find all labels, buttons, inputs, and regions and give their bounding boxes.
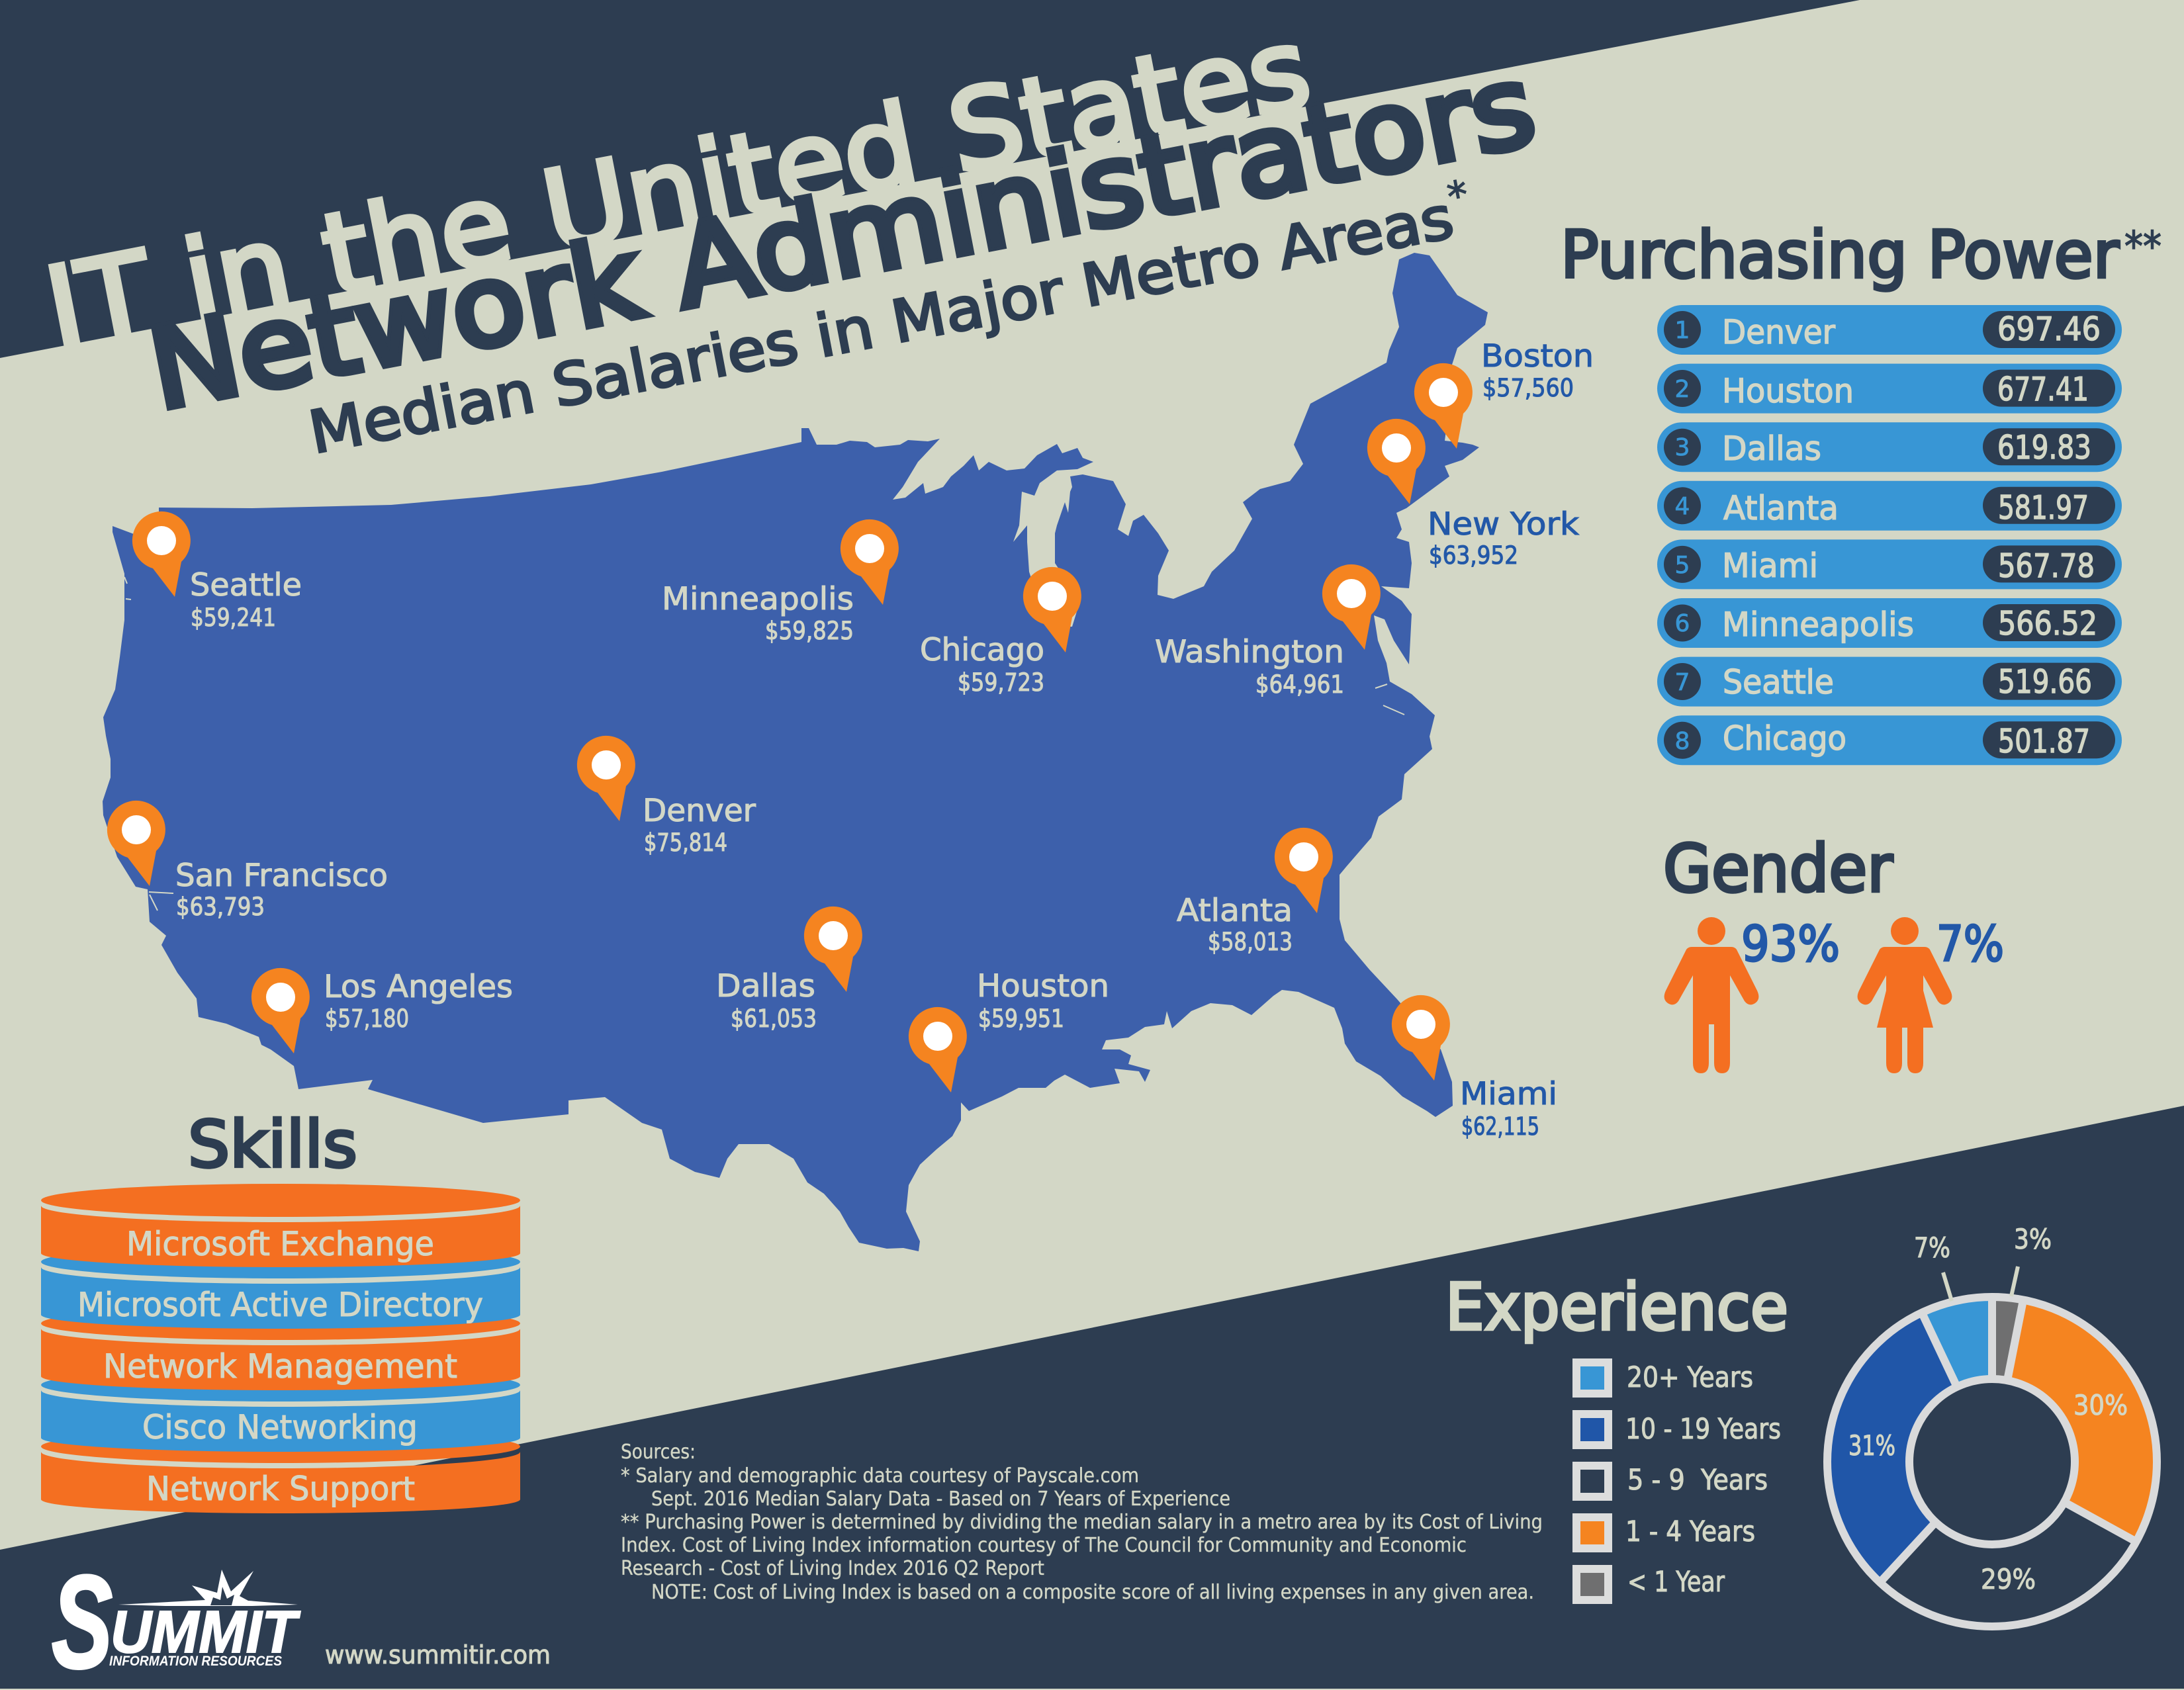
row 8: Chicago: 8: [1675, 728, 1690, 755]
stat: male 93%: 93%: [1741, 916, 1840, 973]
map: contiguous United States: [103, 253, 1488, 1251]
city: Dallas: Dallas: [716, 968, 815, 1004]
city: Dallas: [716, 907, 862, 1033]
disk: Cisco Networking: Cisco Networking: [142, 1408, 418, 1446]
donut chart: experience: [1827, 1223, 2157, 1626]
row 6: Minneapolis: Minneapolis: [1722, 605, 1914, 644]
title: Network Administrators: Network Administrators: [139, 40, 1545, 435]
row 7: Seattle: 519.66: [1998, 663, 2092, 701]
legend item: 10 - 19 Years: 10 - 19 Years: [1625, 1413, 1781, 1446]
disk: Network Management: Network Management: [103, 1347, 457, 1386]
city: Minneapolis: Minneapolis: [662, 581, 854, 617]
row 1: Denver: Denver: [1722, 313, 1835, 351]
legend item: 5 - 9 Years: 5 - 9 Years: [1627, 1464, 1768, 1497]
sources text block: Index. Cost of Living Index information courtesy of The Council for Community and Economic: [621, 1534, 1467, 1557]
row 4: Atlanta: 581.97: [1998, 489, 2089, 527]
legend item: less than 1 Year: [1576, 1566, 1725, 1600]
city: Miami: Miami: [1460, 1076, 1557, 1112]
city: Denver: [577, 736, 756, 857]
city: Atlanta: $58,013: [1208, 928, 1293, 956]
city: New York: $63,952: [1429, 541, 1518, 570]
row 1: Denver: [1657, 305, 2122, 355]
city: Houston: Houston: [977, 968, 1109, 1004]
panel: purchasing power ranking: [1657, 305, 2122, 765]
city: Atlanta: Atlanta: [1177, 893, 1293, 929]
city: Chicago: $59,723: [958, 668, 1044, 697]
row 1: Denver: 697.46: [1997, 310, 2101, 348]
sources text block: * Salary and demographic data courtesy of Payscale.com: [621, 1464, 1139, 1488]
row 2: Houston: [1657, 364, 2122, 414]
sources text block: Sept. 2016 Median Salary Data - Based on 7 Years of Experience: [651, 1488, 1230, 1511]
label: 29%: 29%: [1981, 1563, 2036, 1595]
city: Los Angeles: [251, 968, 513, 1053]
website url: www.summitir.com: [325, 1640, 551, 1669]
city: San Francisco: [107, 801, 388, 921]
row 3: Dallas: 619.83: [1997, 429, 2091, 467]
logo: Summit Information Resources: UMMIT: [111, 1599, 301, 1666]
city: Miami: [1392, 995, 1557, 1141]
city: New York: New York: [1428, 506, 1580, 543]
city: Miami: $62,115: [1461, 1112, 1539, 1141]
row 8: Chicago: [1657, 715, 2122, 765]
city: Washington: $64,961: [1255, 670, 1344, 699]
city: Chicago: Chicago: [920, 632, 1044, 668]
heading: Purchasing Power: **: [2124, 222, 2161, 271]
stat: female 7%: 7%: [1936, 916, 2004, 973]
disk: Microsoft Exchange: [41, 1184, 520, 1267]
row 2: Houston: 2: [1675, 376, 1690, 403]
row 8: Chicago: Chicago: [1723, 719, 1846, 758]
label: 7%: 7%: [1914, 1231, 1950, 1264]
city: San Francisco: San Francisco: [175, 858, 388, 894]
row 2: Houston: 677.41: [1997, 371, 2089, 408]
city: Chicago: [920, 567, 1081, 697]
footer dark band: [0, 1106, 2184, 1690]
row 7: Seattle: [1657, 657, 2122, 707]
heading: Purchasing Power: Purchasing Power: [1561, 218, 2120, 293]
heading: Skills: Skills: [188, 1107, 357, 1182]
city: Minneapolis: [662, 519, 899, 645]
legend item: 1 - 4 Years: [1576, 1515, 1755, 1548]
sources text block: ** Purchasing Power is determined by dividing the median salary in a metro area by its Cost of Living: [621, 1511, 1543, 1534]
city: Dallas: $61,053: [731, 1004, 817, 1033]
city: Atlanta: [1177, 828, 1333, 956]
legend item: 10 - 19 Years: [1576, 1413, 1781, 1446]
disk: Network Support: [41, 1430, 520, 1513]
icon: female figure: [1858, 917, 1952, 1073]
city: Houston: $59,951: [978, 1004, 1064, 1033]
city: Boston: [1414, 338, 1594, 449]
city: San Francisco: $63,793: [176, 893, 265, 921]
legend item: 1 - 4 Years: 1 - 4 Years: [1625, 1515, 1755, 1548]
city: Denver: $75,814: [644, 828, 727, 857]
row 7: Seattle: 7: [1675, 669, 1690, 696]
row 4: Atlanta: [1657, 481, 2122, 531]
row 6: Minneapolis: 566.52: [1998, 605, 2097, 643]
row 4: Atlanta: 4: [1675, 493, 1690, 520]
legend item: 5 - 9 Years: [1576, 1464, 1768, 1497]
disk: Network Management: [41, 1307, 520, 1390]
city: Los Angeles: Los Angeles: [324, 969, 513, 1005]
label: 30%: 30%: [2073, 1389, 2128, 1421]
row 1: Denver: 1: [1675, 317, 1690, 344]
label: 3%: 3%: [2014, 1223, 2052, 1255]
disk: Microsoft Exchange: Microsoft Exchange: [126, 1225, 434, 1263]
disk: Cisco Networking: [41, 1368, 520, 1452]
city: Denver: Denver: [643, 793, 756, 829]
header dark band: [0, 0, 1860, 358]
row 5: Miami: [1657, 539, 2122, 589]
disk: Microsoft Active Directory: [41, 1245, 520, 1329]
sources text block: NOTE: Cost of Living Index is based on a composite score of all living expenses in any given area.: [651, 1581, 1534, 1604]
label: 31%: 31%: [1848, 1429, 1895, 1462]
disk: Microsoft Active Directory: Microsoft Active Directory: [77, 1286, 483, 1324]
legend item: less than 1 Year: < 1 Year: [1627, 1566, 1725, 1599]
sources text block: Sources:: [621, 1441, 696, 1464]
city: Seattle: $59,241: [191, 603, 276, 632]
sources text block: Research - Cost of Living Index 2016 Q2 Report: [621, 1557, 1044, 1580]
row 5: Miami: 5: [1675, 552, 1690, 579]
panel: skills cylinder stack: [41, 1184, 520, 1513]
disk: Network Support: Network Support: [146, 1470, 415, 1508]
legend item: 20+ Years: [1576, 1361, 1753, 1394]
tick: 3%: [2011, 1267, 2018, 1296]
row 3: Dallas: [1657, 422, 2122, 472]
tick: 7%: [1943, 1272, 1952, 1301]
city: Los Angeles: $57,180: [325, 1004, 409, 1033]
row 7: Seattle: Seattle: [1723, 663, 1834, 701]
subtitle: Median Salaries in Major Metro Areas: *: [1444, 171, 1472, 221]
row 5: Miami: 567.78: [1998, 547, 2095, 585]
heading: Experience: Experience: [1445, 1270, 1788, 1345]
icon: male figure: [1664, 917, 1758, 1073]
row 6: Minneapolis: 6: [1675, 610, 1690, 637]
row 5: Miami: Miami: [1722, 547, 1818, 585]
legend item: 20+ Years: 20+ Years: [1627, 1361, 1753, 1394]
city: Washington: Washington: [1155, 634, 1344, 670]
city: Seattle: Seattle: [190, 567, 302, 603]
heading: Gender: Gender: [1663, 831, 1893, 907]
city: Houston: [909, 968, 1109, 1092]
row 2: Houston: Houston: [1722, 372, 1854, 410]
row 8: Chicago: 501.87: [1998, 723, 2090, 760]
city: Seattle: [132, 511, 302, 632]
city: Boston: Boston: [1481, 338, 1594, 375]
subtitle: Median Salaries in Major Metro Areas: Median Salaries in Major Metro Areas: [304, 183, 1459, 467]
legend: experience: [1576, 1361, 1781, 1600]
sources text block: [621, 1441, 1543, 1604]
row 3: Dallas: 3: [1675, 434, 1690, 461]
title: IT in the United States: IT in the United States: [36, 3, 1320, 374]
row 6: Minneapolis: [1657, 598, 2122, 648]
logo: Summit Information Resources: INFORMATION RESOURCES: [109, 1654, 282, 1669]
row 3: Dallas: Dallas: [1722, 429, 1821, 468]
city: Boston: $57,560: [1482, 374, 1574, 402]
city: New York: [1367, 419, 1580, 570]
city: Washington: [1155, 564, 1381, 699]
row 4: Atlanta: Atlanta: [1723, 489, 1839, 527]
city: Minneapolis: $59,825: [765, 617, 854, 645]
logo: Summit Information Resources: [52, 1548, 301, 1690]
